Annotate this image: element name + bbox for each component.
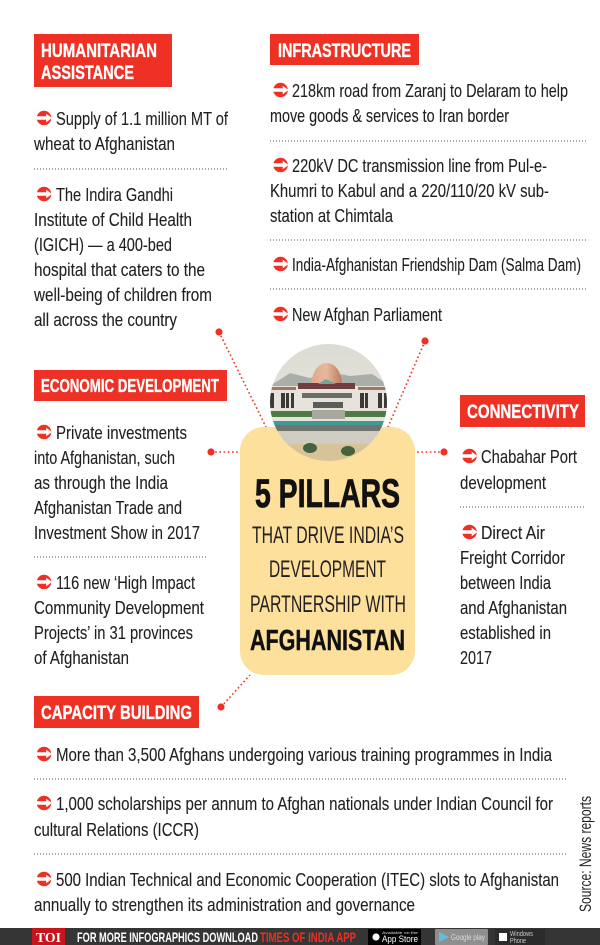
text: Chabahar Port: Chabahar Port: [481, 446, 577, 467]
badge: Windows Phone: [495, 929, 545, 945]
text: IGICH hospital: Institute of Child Health: [34, 209, 192, 230]
title text: PARTNERSHIP WITH: [250, 591, 406, 618]
title text: AFGHANISTAN: [250, 625, 405, 657]
text: air freight corridor: [460, 522, 567, 668]
heading: economic development: ECONOMIC DEVELOPMENT: [41, 376, 219, 396]
text: IGICH hospital: all across the country: [34, 309, 178, 330]
text: scholarships: cultural Relations (ICCR): [34, 819, 199, 840]
text: IGICH hospital: well-being of children from: [33, 284, 212, 305]
panel: humanitarian assistance: [33, 34, 229, 330]
heading: humanitarian assistance: HUMANITARIAN: [41, 41, 157, 62]
text: road: [270, 80, 568, 126]
footer app name: TIMES OF INDIA APP: [260, 929, 356, 945]
heading: economic development: [34, 370, 227, 401]
heading: infrastructure: [270, 34, 419, 65]
text: transmission line: [270, 155, 549, 226]
panel: connectivity: [460, 395, 585, 668]
text: IGICH hospital: The Indira Gandhi: [56, 184, 173, 205]
badge: Windows Phone: Windows: [510, 931, 533, 938]
connector lines: [207, 328, 448, 711]
panel: capacity building: [34, 696, 566, 915]
panel: economic development: [34, 370, 227, 668]
text: wheat supply: [33, 108, 229, 154]
title text: [250, 472, 406, 657]
text: IGICH hospital: [33, 184, 212, 330]
text: air freight corridor: 2017: [460, 647, 492, 668]
text: Chabahar Port: [460, 446, 577, 493]
text: IGICH hospital: hospital that caters to the: [34, 259, 205, 280]
heading: infrastructure: INFRASTRUCTURE: [278, 41, 411, 62]
text: private investments: [34, 422, 200, 543]
panel: central title card: [240, 344, 415, 675]
text: private investments: Private investments: [56, 422, 187, 443]
badge: App Store: [368, 929, 421, 945]
text: private investments: Investment Show in 2017: [34, 522, 200, 543]
badge: Google play: [435, 929, 488, 945]
text: wheat supply: wheat to Afghanistan: [33, 133, 175, 154]
text: private investments: Afghanistan Trade and: [34, 497, 182, 518]
heading: capacity building: [34, 696, 199, 728]
title text: 5 PILLARS: [255, 472, 400, 516]
heading: capacity building: CAPACITY BUILDING: [41, 703, 192, 724]
text: air freight corridor: Direct Air: [481, 522, 545, 543]
text: community projects: of Afghanistan: [34, 647, 129, 668]
text: IGICH hospital: (IGICH) — a 400-bed: [34, 234, 172, 255]
heading: humanitarian assistance: ASSISTANCE: [41, 63, 134, 84]
text: ITEC slots: annually to strengthen its administration and governance: [34, 894, 415, 915]
text: community projects: [34, 572, 204, 668]
heading: humanitarian assistance: [34, 34, 172, 87]
footer call to action: FOR MORE INFOGRAPHICS DOWNLOAD: [77, 929, 258, 945]
panel: infrastructure: [270, 34, 588, 325]
text: air freight corridor: established in: [460, 622, 551, 643]
title text: THAT DRIVE INDIA’S: [252, 522, 404, 549]
text: air freight corridor: Freight Corridor: [460, 547, 565, 568]
text: Chabahar Port: development: [460, 472, 546, 493]
badge: App Store: Available on the: [382, 930, 419, 935]
text: road: move goods & services to Iran border: [270, 105, 509, 126]
text: community projects: Community Development: [34, 597, 204, 618]
footer bar: [0, 928, 600, 945]
logo: TOI: [32, 928, 65, 945]
icon: parliament building photo: [270, 344, 387, 462]
text: ITEC slots: [34, 869, 559, 915]
text: community projects: 116 new ‘High Impact: [56, 572, 195, 593]
title text: DEVELOPMENT: [269, 556, 386, 583]
text: scholarships: [34, 793, 553, 840]
text: parliament: New Afghan Parliament: [292, 304, 442, 325]
source note: Source: News reports: [576, 796, 595, 912]
badge: Windows Phone: Phone: [510, 938, 526, 945]
text: air freight corridor: between India: [460, 572, 552, 593]
text: wheat supply: Supply of 1.1 million MT of: [56, 108, 229, 129]
badge: App Store: App Store: [382, 934, 418, 944]
text: transmission line: station at Chimtala: [270, 205, 394, 226]
text: community projects: Projects’ in 31 provinces: [34, 622, 193, 643]
heading: connectivity: [460, 395, 585, 427]
text: air freight corridor: and Afghanistan: [460, 597, 567, 618]
text: private investments: into Afghanistan, such: [34, 447, 175, 468]
text: private investments: as through the India: [34, 472, 169, 493]
badge: Google play: Google play: [451, 933, 485, 942]
